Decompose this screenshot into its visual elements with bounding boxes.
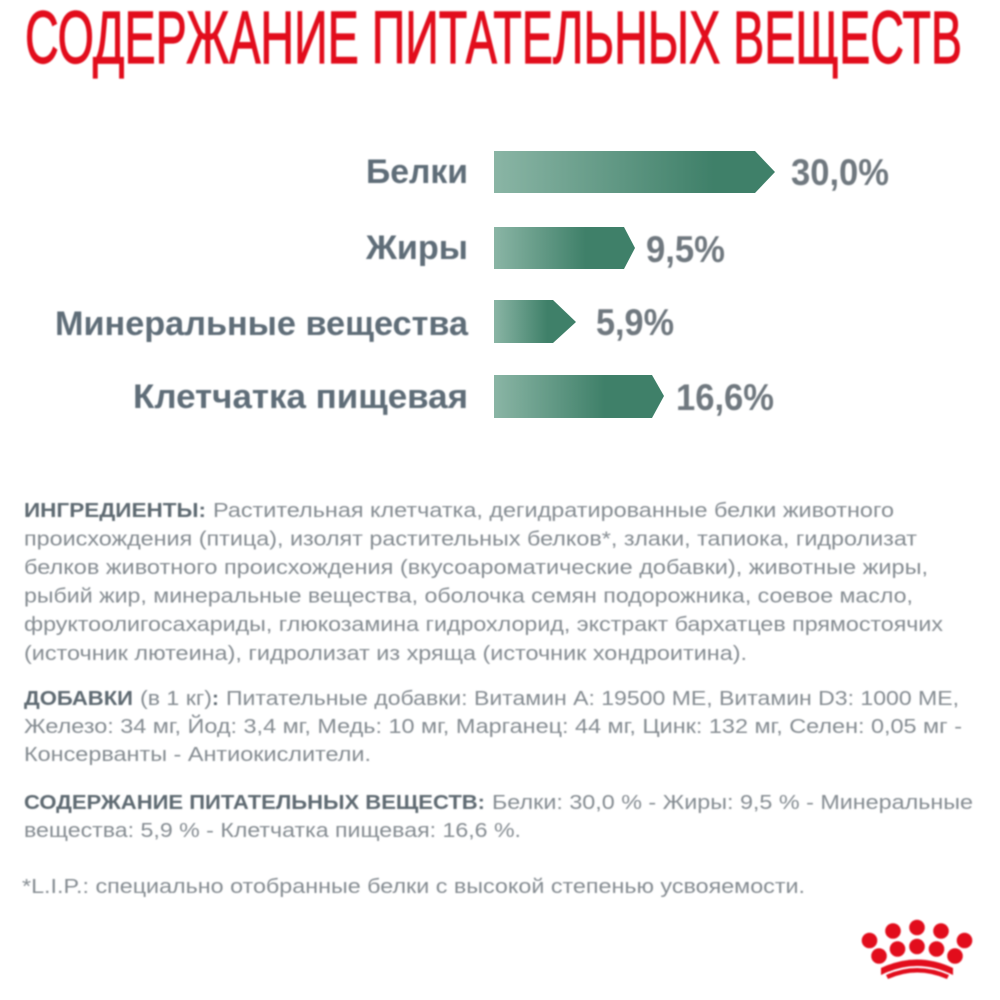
- row: Минеральные вещества: [55, 300, 674, 343]
- text block: additives: (в 1 кг): [140, 687, 212, 710]
- text block: additives: Питательные добавки: Витамин А: 19500 МЕ, Витамин D3: 1000 МЕ,: [226, 687, 959, 710]
- row: Клетчатка пищевая: [133, 375, 774, 418]
- row: Клетчатка пищевая: 16,6%: [676, 377, 774, 418]
- text block: ingredients: ИНГРЕДИЕНТЫ:: [24, 499, 206, 522]
- text block: ingredients: фруктоолигосахариды, глюкозамина гидрохлорид, экстракт бархатцев прямостоячих: [24, 613, 944, 636]
- text block: nutrient content: [24, 791, 973, 842]
- row: Жиры: Жиры: [365, 229, 468, 267]
- text block: nutrient content: вещества: 5,9 % - Клетчатка пищевая: 16,6 %.: [24, 819, 521, 842]
- bar chart: nutrient content: [55, 151, 889, 418]
- text block: additives: :: [212, 687, 219, 710]
- row: Жиры: [365, 227, 725, 270]
- text block: ingredients: (источник лютеина), гидролизат из хряща (источник хондроитина).: [24, 642, 747, 665]
- row: Клетчатка пищевая: Клетчатка пищевая: [133, 378, 468, 416]
- text block: ingredients: рыбий жир, минеральные вещества, оболочка семян подорожника, соевое масло,: [24, 584, 913, 608]
- text block: ingredients: [24, 499, 944, 665]
- row: Жиры: 9,5%: [646, 229, 725, 270]
- text block: ingredients: белков животного происхождения (вкусоароматические добавки), животные жиры,: [24, 556, 928, 579]
- row: Белки: Белки: [366, 153, 468, 191]
- text block: ingredients: происхождения (птица), изолят растительных белков*, злаки, тапиока, гидролизат: [24, 528, 918, 550]
- text block: additives: [24, 687, 962, 766]
- row: Минеральные вещества: 5,9%: [596, 302, 674, 343]
- text block: additives: ДОБАВКИ: [24, 687, 133, 710]
- text block: ingredients: Растительная клетчатка, дегидратированные белки животного: [213, 499, 894, 522]
- row: Белки: [366, 151, 889, 193]
- icon: royal canin crown logo: [862, 920, 972, 979]
- text block: nutrient content: СОДЕРЖАНИЕ ПИТАТЕЛЬНЫХ ВЕЩЕСТВ:: [24, 791, 485, 814]
- row: Белки: 30,0%: [791, 152, 889, 193]
- text block: additives: Консерванты - Антиокислители.: [24, 743, 371, 766]
- text block: nutrient content: Белки: 30,0 % - Жиры: 9,5 % - Минеральные: [492, 791, 973, 814]
- row: Минеральные вещества: Минеральные вещества: [55, 305, 469, 343]
- text block: additives: Железо: 34 мг, Йод: 3,4 мг, Медь: 10 мг, Марганец: 44 мг, Цинк: 132 мг, Селен: 0,05 мг -: [24, 714, 962, 738]
- footnote: *L.I.P.: специально отобранные белки с высокой степенью усвояемости.: [22, 875, 805, 898]
